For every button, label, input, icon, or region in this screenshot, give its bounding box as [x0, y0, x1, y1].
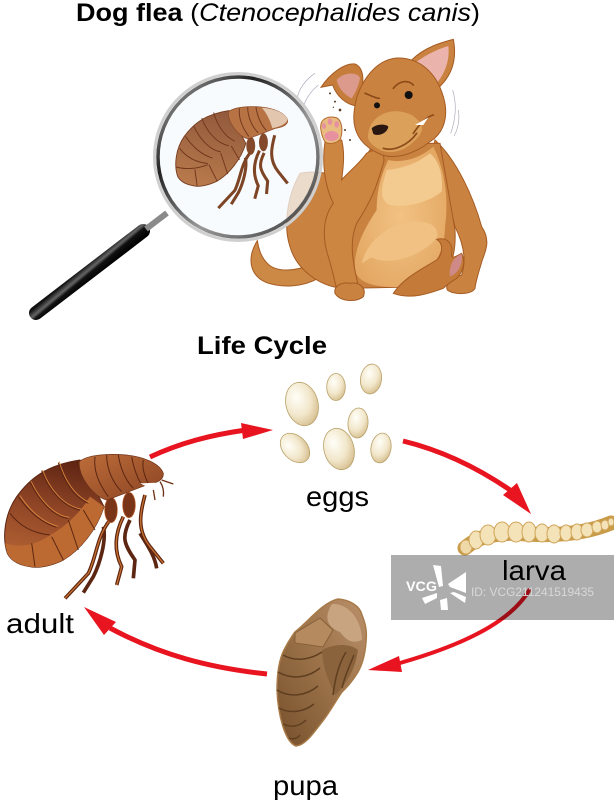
pupa body	[277, 599, 366, 746]
dog belly highlight	[362, 221, 437, 263]
crossed hind leg	[393, 239, 464, 296]
paw pads	[322, 118, 339, 141]
scratch marks	[297, 73, 459, 136]
pupa leg shadow	[322, 645, 358, 695]
dog foot pad	[450, 254, 462, 277]
right ear	[412, 39, 455, 89]
pupa wing plate	[295, 618, 333, 647]
label: eggs: eggs	[306, 481, 369, 512]
arrow: larva to pupa	[368, 589, 530, 672]
raised hind leg	[324, 140, 384, 288]
dog body	[287, 143, 455, 288]
flea thorax	[228, 107, 288, 139]
teeth	[415, 117, 428, 125]
front paw	[335, 283, 364, 300]
label: adult: adult	[6, 608, 74, 639]
watermark logo: VCG	[406, 578, 437, 594]
watermark band	[391, 555, 614, 620]
magnifying glass	[36, 74, 322, 313]
head	[354, 58, 446, 157]
larva	[460, 518, 614, 554]
handle connector	[146, 213, 167, 229]
pupa head highlight	[327, 604, 362, 642]
pupa segments	[277, 652, 354, 739]
dog right front leg	[432, 140, 487, 294]
arrow: pupa to adult	[84, 607, 267, 674]
adult mouthparts	[153, 480, 173, 500]
adult flea	[5, 454, 173, 598]
eggs	[274, 363, 393, 473]
pupa	[277, 599, 366, 746]
adult upper leg joints	[105, 492, 135, 523]
nose	[372, 125, 388, 135]
flea thighs	[246, 133, 268, 155]
flea legs	[218, 135, 288, 208]
heading: life cycle: Life Cycle	[197, 332, 327, 360]
adult lower plates	[5, 497, 104, 567]
larva body base	[465, 523, 611, 548]
adult legs	[65, 495, 163, 598]
raised paw	[321, 117, 342, 143]
flea abdomen	[176, 111, 246, 186]
brow and mouth lines	[365, 82, 433, 149]
right ear inner	[417, 46, 449, 83]
dog chest highlight	[382, 153, 442, 206]
lens	[158, 77, 318, 237]
dog tail	[251, 241, 318, 286]
dirt specks	[329, 92, 351, 141]
lens outer rim	[154, 74, 322, 240]
adult abdomen	[5, 460, 104, 567]
flea segments	[176, 107, 266, 186]
flea head glare	[262, 108, 288, 128]
watermark logo	[406, 565, 466, 610]
arrow: adult to eggs	[150, 423, 273, 457]
dog chest and belly	[355, 147, 446, 287]
eyes	[374, 91, 413, 108]
muzzle	[368, 111, 422, 152]
left ear inner	[337, 74, 360, 98]
adult segment lines	[10, 455, 148, 567]
magnified flea	[176, 107, 288, 208]
adult white highlight	[140, 483, 158, 487]
adult orange rim highlights	[20, 462, 89, 526]
illustration: scratching dog	[251, 39, 487, 300]
larva segments	[460, 518, 614, 554]
left ear	[321, 64, 363, 106]
handle	[36, 231, 143, 313]
arrow: eggs to larva	[403, 441, 531, 514]
watermark id: ID: VCG211241519435	[471, 587, 594, 599]
adult thorax and head	[79, 454, 163, 500]
label: larva: larva	[502, 555, 566, 586]
